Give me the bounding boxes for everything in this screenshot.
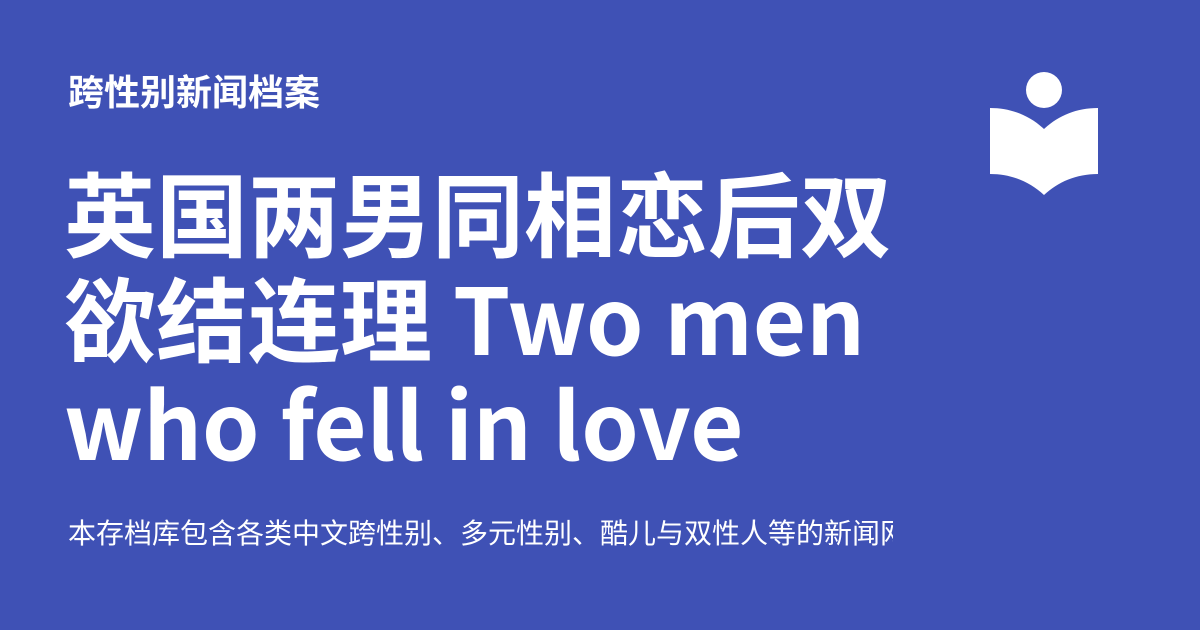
site label: 跨性别新闻档案 <box>68 64 320 116</box>
icon: book reader logo <box>990 72 1098 195</box>
title: 欲结连理 Two men <box>64 249 865 382</box>
description: 本存档库包含各类中文跨性别、多元性别、酷儿与双性人等的新闻网 <box>68 512 893 552</box>
title <box>64 158 892 473</box>
